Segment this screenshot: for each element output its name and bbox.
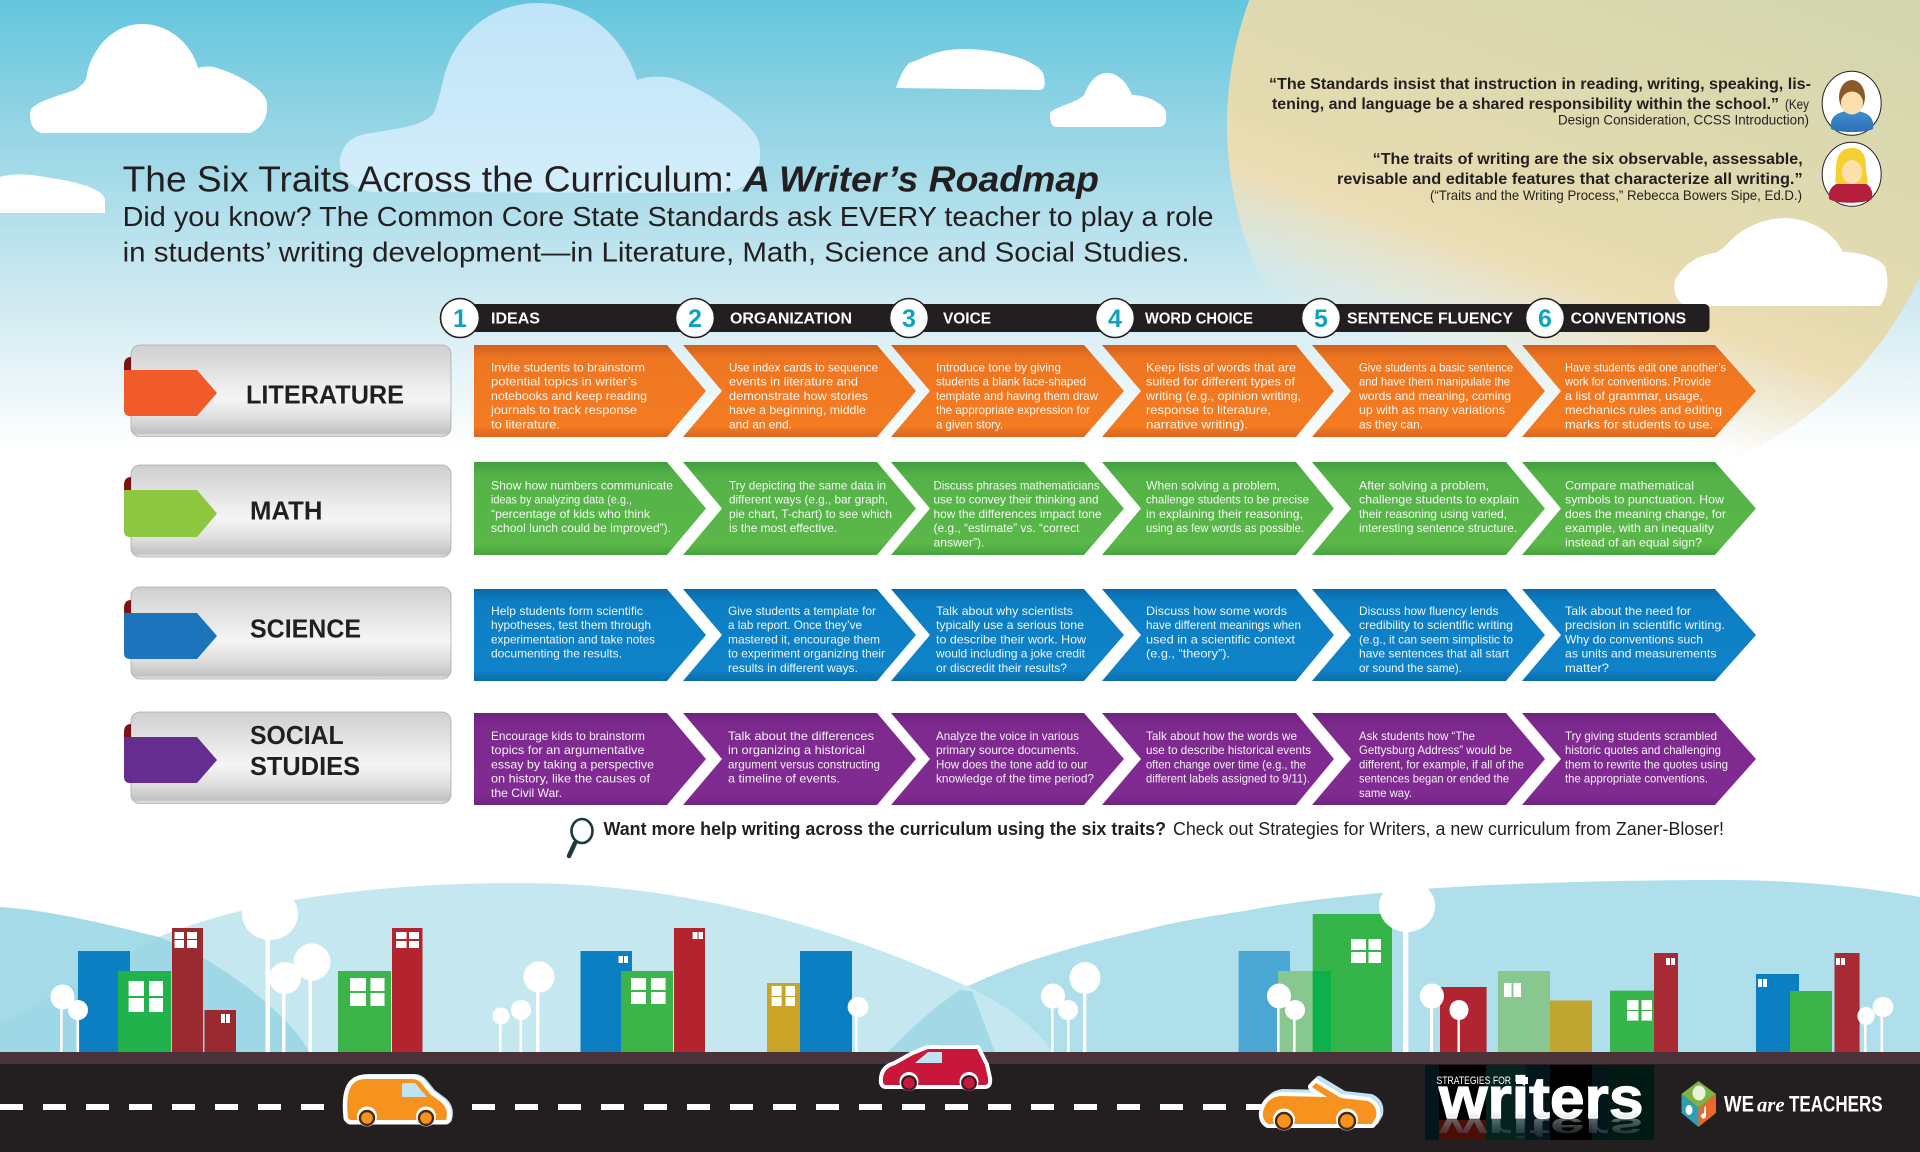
cell: literature sentence fluency: as they can. xyxy=(1359,417,1423,431)
row: math xyxy=(474,462,1756,555)
trait 1: ideas: 1 xyxy=(453,305,467,333)
cell: literature organization xyxy=(683,345,916,437)
trait 5: sentence fluency: SENTENCE FLUENCY xyxy=(1347,310,1514,328)
cell: science sentence fluency: (e.g., it can seem simplistic to xyxy=(1359,632,1513,646)
cell: science organization xyxy=(683,589,916,681)
cell: literature conventions xyxy=(1522,345,1756,437)
cell: literature conventions: work for conventions. Provide xyxy=(1564,375,1711,389)
cell: literature word choice: Keep lists of words that are xyxy=(1146,360,1296,374)
cell: math sentence fluency: interesting sentence structure. xyxy=(1359,521,1517,535)
cell: math voice: Discuss phrases mathematicians xyxy=(934,478,1100,492)
logo: strategies for writers: writers xyxy=(1438,1066,1644,1131)
cell: science conventions: matter? xyxy=(1565,661,1609,675)
cell: social studies organization: a timeline of events. xyxy=(728,772,840,786)
cell: social studies conventions: them to rewrite the quotes using xyxy=(1565,757,1728,771)
cell: science word choice: Discuss how some words xyxy=(1146,604,1287,618)
cell: social studies ideas: on history, like the causes of xyxy=(491,772,651,786)
trait 2: organization: 2 xyxy=(688,305,702,333)
cloud: left edge xyxy=(0,174,105,213)
icon: boy avatar xyxy=(1822,71,1881,135)
cloud: top left xyxy=(30,24,267,133)
cell: literature organization: have a beginning, middle xyxy=(729,403,866,417)
cell: literature organization: Use index cards to sequence xyxy=(729,360,878,374)
background: sun xyxy=(1227,0,1920,488)
cell: science word choice xyxy=(1102,589,1334,681)
cell: science voice: to describe their work. How xyxy=(936,632,1086,646)
cell: literature ideas: notebooks and keep reading xyxy=(491,389,647,403)
cell: social studies voice: Analyze the voice in various xyxy=(936,729,1079,743)
cell: literature conventions: Have students edit one another’s xyxy=(1565,360,1726,374)
background: sky xyxy=(0,0,1920,450)
trait 1: ideas xyxy=(440,298,540,338)
quote: Key Design Consideration: (Key xyxy=(1785,96,1809,112)
cell: literature sentence fluency: Give students a basic sentence xyxy=(1359,360,1513,374)
cell: social studies ideas: Encourage kids to brainstorm xyxy=(491,729,645,743)
logo: strategies for writers: STRATEGIES FOR xyxy=(1436,1075,1511,1087)
title xyxy=(123,159,1099,200)
callout: more help: Want more help writing across the curriculum using the six traits? xyxy=(604,819,1166,839)
label card: science: SCIENCE xyxy=(250,614,361,644)
cell: math organization: is the most effective. xyxy=(729,521,837,535)
cell: science word choice: have different meanings when xyxy=(1146,618,1301,632)
cell: math ideas: “percentage of kids who think xyxy=(491,507,650,521)
icon: girl avatar xyxy=(1822,142,1881,206)
trait 2: organization xyxy=(676,298,852,338)
cell: math ideas xyxy=(474,462,706,555)
cell: science sentence fluency: credibility to scientific writing xyxy=(1359,618,1513,632)
cell: science organization: results in different ways. xyxy=(728,661,858,675)
cell: social studies organization: in organizing a historical xyxy=(728,743,865,757)
cell: literature sentence fluency: words and meaning, coming xyxy=(1358,389,1511,403)
cell: literature word choice: writing (e.g., opinion writing, xyxy=(1145,389,1301,403)
cell: science ideas: hypotheses, test them through xyxy=(491,618,651,632)
cell: math organization: pie chart, T-chart) to see which xyxy=(729,507,892,521)
cell: social studies voice: knowledge of the time period? xyxy=(936,772,1094,786)
trait 4: word choice: WORD CHOICE xyxy=(1145,310,1253,328)
cell: math conventions: does the meaning change, for xyxy=(1565,507,1726,521)
cell: literature sentence fluency: and have them manipulate the xyxy=(1359,375,1510,389)
cell: science voice xyxy=(891,589,1124,681)
cell: math ideas: ideas by analyzing data (e.g., xyxy=(491,493,632,507)
cell: math sentence fluency: challenge students to explain xyxy=(1359,493,1519,507)
cell: science conventions: Talk about the need for xyxy=(1565,604,1691,618)
label card: science xyxy=(124,587,451,679)
cell: social studies conventions: historic quotes and challenging xyxy=(1565,743,1721,757)
callout: more help: Check out Strategies for Writers, a new curriculum from Zaner-Bloser! xyxy=(1173,819,1724,839)
cloud: pale blue large xyxy=(340,3,760,193)
label card: literature xyxy=(124,345,451,436)
cell: science sentence fluency: have sentences that all start xyxy=(1359,647,1510,661)
cell: literature voice: template and having them draw xyxy=(936,389,1098,403)
cell: science ideas xyxy=(474,589,706,681)
title: The Six Traits Across the Curriculum: xyxy=(123,159,734,200)
cell: math conventions: instead of an equal sign? xyxy=(1565,535,1702,549)
cell: science voice: or discredit their results? xyxy=(936,661,1067,675)
trait 1: ideas: IDEAS xyxy=(491,310,540,328)
trait 3: voice: VOICE xyxy=(943,310,991,328)
trait 6: conventions: 6 xyxy=(1538,305,1552,333)
cell: science conventions: Why do conventions such xyxy=(1565,632,1703,646)
cell: social studies sentence fluency: sentences began or ended the xyxy=(1359,772,1509,786)
scene: left trees xyxy=(50,888,868,1052)
cell: science conventions: as units and measurements xyxy=(1565,647,1717,661)
cell: literature organization: events in literature and xyxy=(729,375,858,389)
cell: math conventions xyxy=(1522,462,1756,555)
cell: literature voice xyxy=(891,345,1124,437)
cell: social studies voice: How does the tone add to our xyxy=(936,757,1088,771)
cell: literature organization: and an end. xyxy=(729,417,792,431)
trait 6: conventions: CONVENTIONS xyxy=(1571,310,1686,328)
cell: math organization: Try depicting the same data in xyxy=(729,478,886,492)
scene: right trees xyxy=(1041,880,1893,1052)
cell: social studies organization: argument versus constructing xyxy=(728,757,880,771)
cell: science voice: Talk about why scientists xyxy=(936,604,1073,618)
quote: Traits and the Writing Process xyxy=(1337,151,1803,203)
cell: social studies sentence fluency xyxy=(1312,713,1545,805)
cell: science voice: typically use a serious tone xyxy=(936,618,1084,632)
cell: math conventions: example, with an inequality xyxy=(1565,521,1714,535)
cell: literature ideas: Invite students to brainstorm xyxy=(491,360,645,374)
header bar: six traits xyxy=(440,298,1710,338)
quote: Key Design Consideration: Design Consideration, CCSS Introduction) xyxy=(1558,112,1809,128)
cell: social studies conventions: Try giving students scrambled xyxy=(1565,729,1717,743)
title: A Writer’s Roadmap xyxy=(742,159,1099,200)
cell: math voice: (e.g., “estimate” vs. “correct xyxy=(934,521,1080,535)
cell: math sentence fluency xyxy=(1312,462,1545,555)
cell: science word choice: (e.g., “theory”). xyxy=(1146,647,1230,661)
label card: social studies: STUDIES xyxy=(250,751,360,781)
trait 3: voice: 3 xyxy=(902,305,916,333)
cell: social studies word choice: often change over time (e.g., the xyxy=(1146,757,1306,771)
cell: science organization: to experiment organizing their xyxy=(728,647,885,661)
cell: literature ideas: potential topics in writer’s xyxy=(491,375,637,389)
cell: math sentence fluency: their reasoning using varied, xyxy=(1359,507,1507,521)
scene: right city buildings xyxy=(1239,914,1860,1052)
row: science xyxy=(474,589,1756,681)
logo: strategies for writers: writers xyxy=(1438,1112,1643,1145)
trait 5: sentence fluency xyxy=(1302,298,1514,338)
cell: science organization: a lab report. Once they’ve xyxy=(728,618,862,632)
cell: literature sentence fluency xyxy=(1312,345,1545,437)
cell: social studies sentence fluency: Ask students how “The xyxy=(1359,729,1475,743)
subtitle: Did you know? The Common Core State Standards ask EVERY teacher to play a role xyxy=(123,201,1214,232)
cell: social studies organization xyxy=(683,713,916,805)
cell: math word choice: in explaining their reasoning, xyxy=(1146,507,1303,521)
cell: social studies word choice xyxy=(1102,713,1334,805)
row: literature xyxy=(474,345,1756,437)
cell: social studies voice xyxy=(891,713,1124,805)
icon: magnifying glass xyxy=(569,819,592,856)
trait 5: sentence fluency: 5 xyxy=(1314,305,1328,333)
cell: math voice: how the differences impact tone xyxy=(934,507,1102,521)
label card: math: MATH xyxy=(250,495,322,525)
icon: orange van xyxy=(347,1078,449,1126)
cell: science ideas: documenting the results. xyxy=(491,647,622,661)
cloud: small centre right xyxy=(896,49,1045,90)
cell: math voice: answer”). xyxy=(934,535,984,549)
cell: math organization: different ways (e.g., bar graph, xyxy=(729,493,888,507)
icon: orange convertible xyxy=(1263,1080,1379,1130)
cell: social studies sentence fluency: same way. xyxy=(1359,786,1412,800)
scene: left city buildings xyxy=(78,928,852,1052)
cell: literature conventions: a list of grammar, usage, xyxy=(1565,389,1703,403)
scene: hills xyxy=(0,880,1920,1052)
cell: literature word choice: narrative writing). xyxy=(1146,417,1248,431)
cell: social studies ideas xyxy=(474,713,706,805)
cell: science organization: Give students a template for xyxy=(728,604,876,618)
callout: more help xyxy=(604,819,1724,839)
cell: literature sentence fluency: up with as many variations xyxy=(1359,403,1505,417)
cell: social studies voice: primary source documents. xyxy=(936,743,1079,757)
cell: math word choice: using as few words as possible. xyxy=(1146,521,1304,535)
cell: literature word choice: response to literature, xyxy=(1146,403,1271,417)
quote: Key Design Consideration xyxy=(1269,76,1811,128)
cell: literature voice: a given story. xyxy=(936,417,1003,431)
cell: science sentence fluency: Discuss how fluency lends xyxy=(1359,604,1499,618)
cell: literature ideas: to literature. xyxy=(491,417,560,431)
cell: math word choice: challenge students to be precise xyxy=(1146,493,1309,507)
quote: Traits and the Writing Process: revisable and editable features that characterize all writing.” xyxy=(1337,171,1803,188)
cell: social studies conventions: the appropriate conventions. xyxy=(1565,772,1708,786)
cell: science sentence fluency: or sound the same). xyxy=(1359,661,1462,675)
cell: literature voice: Introduce tone by giving xyxy=(936,360,1061,374)
cloud: right xyxy=(1674,218,1887,306)
cell: literature organization: demonstrate how stories xyxy=(729,389,868,403)
cloud: small right xyxy=(1050,73,1166,127)
cell: literature voice: the appropriate expression for xyxy=(936,403,1090,417)
cell: social studies sentence fluency: different, for example, if all of the xyxy=(1359,757,1524,771)
cell: science conventions xyxy=(1522,589,1756,681)
label card: social studies xyxy=(124,712,451,804)
cell: science ideas: Help students form scientific xyxy=(491,604,643,618)
cell: math ideas: school lunch could be improved”). xyxy=(491,521,671,535)
cell: social studies conventions xyxy=(1522,713,1756,805)
cell: math voice xyxy=(891,462,1124,555)
cell: science sentence fluency xyxy=(1312,589,1545,681)
cell: math voice: use to convey their thinking and xyxy=(934,493,1098,507)
trait 2: organization: ORGANIZATION xyxy=(730,310,852,328)
cell: math word choice xyxy=(1102,462,1334,555)
cell: science conventions: precision in scientific writing. xyxy=(1565,618,1725,632)
icon: red car xyxy=(883,1049,988,1091)
cell: math word choice: When solving a problem, xyxy=(1146,478,1280,492)
cell: science organization: mastered it, encourage them xyxy=(728,632,880,646)
cell: math conventions: symbols to punctuation. How xyxy=(1565,493,1724,507)
cell: social studies word choice: use to describe historical events xyxy=(1146,743,1311,757)
logo: we are teachers: TEACHERS xyxy=(1789,1092,1883,1117)
trait 6: conventions xyxy=(1526,298,1686,338)
trait 3: voice xyxy=(890,298,991,338)
quote: Key Design Consideration: tening, and language be a shared responsibility within the school.” xyxy=(1272,96,1779,113)
cell: social studies ideas: topics for an argumentative xyxy=(491,743,645,757)
subtitle xyxy=(123,201,1214,268)
cell: literature conventions: marks for students to use. xyxy=(1565,417,1713,431)
label card: social studies: SOCIAL xyxy=(250,720,344,750)
subtitle: in students’ writing development—in Literature, Math, Science and Social Studies. xyxy=(123,237,1190,268)
cell: literature ideas: journals to track response xyxy=(490,403,637,417)
cell: social studies ideas: essay by taking a perspective xyxy=(491,757,654,771)
cell: literature word choice: suited for different types of xyxy=(1146,375,1296,389)
cell: science ideas: experimentation and take notes xyxy=(491,632,655,646)
cell: literature word choice xyxy=(1102,345,1334,437)
trait 4: word choice xyxy=(1096,298,1253,338)
logo: strategies for writers xyxy=(1425,1065,1654,1145)
cell: social studies organization: Talk about the differences xyxy=(728,729,874,743)
cell: math organization xyxy=(683,462,916,555)
cell: social studies word choice: Talk about how the words we xyxy=(1146,729,1297,743)
logo: we are teachers: are xyxy=(1757,1095,1785,1117)
cell: social studies ideas: the Civil War. xyxy=(491,786,562,800)
cell: social studies sentence fluency: Gettysburg Address” would be xyxy=(1359,743,1512,757)
cell: literature ideas xyxy=(474,345,706,437)
label card: math xyxy=(124,465,451,557)
cell: science voice: would including a joke credit xyxy=(935,647,1086,661)
cell: math ideas: Show how numbers communicate xyxy=(491,478,673,492)
cell: math sentence fluency: After solving a problem, xyxy=(1359,478,1489,492)
cell: literature voice: students a blank face-shaped xyxy=(936,375,1086,389)
logo: we are teachers xyxy=(1682,1081,1883,1127)
label card: literature: LITERATURE xyxy=(246,379,404,409)
cell: literature conventions: mechanics rules and editing xyxy=(1565,403,1722,417)
quote: Traits and the Writing Process: (“Traits and the Writing Process,” Rebecca Bowers Sipe, Ed.D.) xyxy=(1430,187,1802,203)
logo: we are teachers: WE xyxy=(1724,1092,1754,1117)
trait 4: word choice: 4 xyxy=(1108,305,1122,333)
cell: math conventions: Compare mathematical xyxy=(1565,478,1694,492)
row: social studies xyxy=(474,713,1756,805)
cell: social studies word choice: different labels assigned to 9/11). xyxy=(1146,772,1310,786)
quote: Traits and the Writing Process: “The traits of writing are the six observable, assessable, xyxy=(1373,151,1803,168)
quote: Key Design Consideration: “The Standards insist that instruction in reading, writing, speaking, lis- xyxy=(1269,76,1811,93)
scene: road xyxy=(0,1052,1920,1152)
cell: science word choice: used in a scientific context xyxy=(1146,632,1296,646)
